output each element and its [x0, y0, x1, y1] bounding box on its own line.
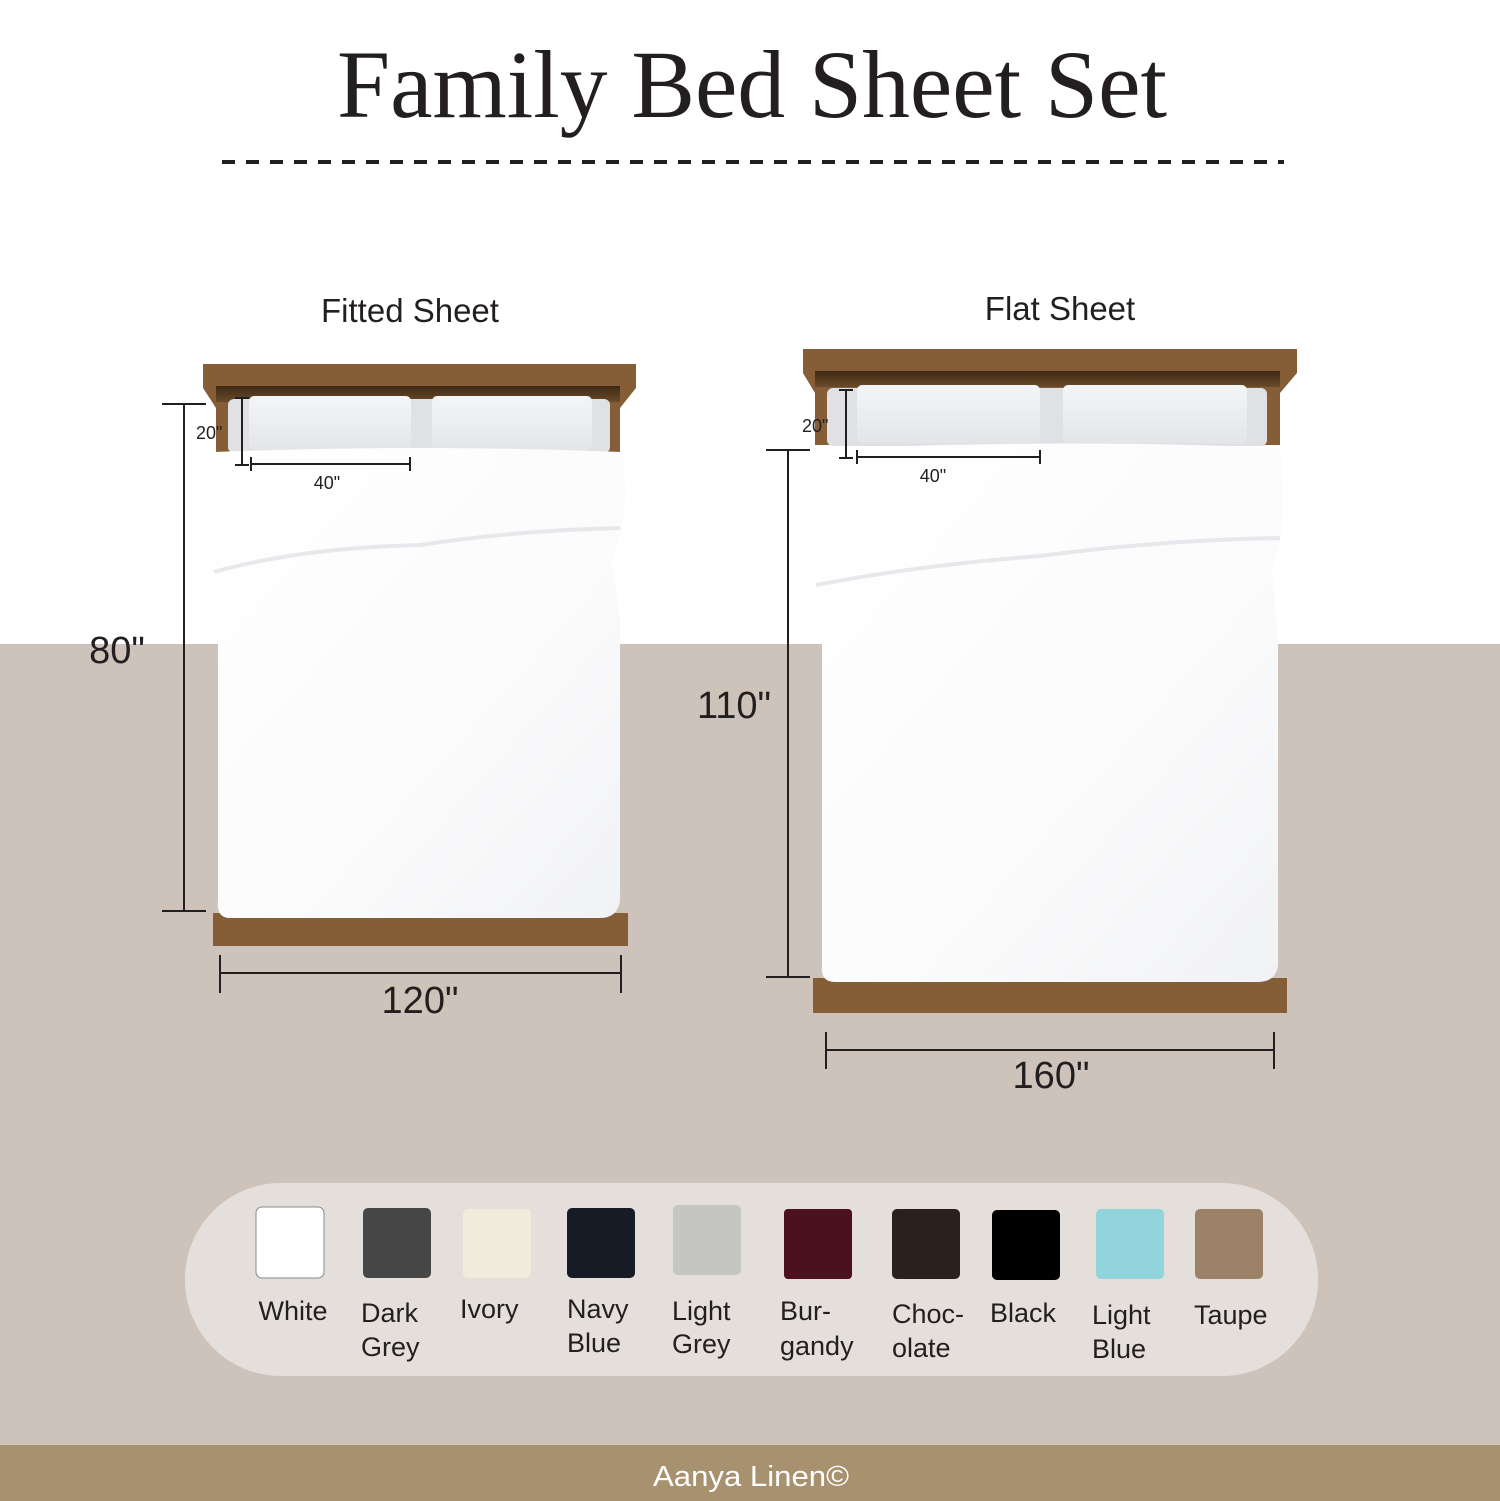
label: 110": 110": [697, 685, 771, 727]
label: 20" 40" fitted: 20": [196, 423, 222, 443]
swatch: ivory: Ivory: [460, 1294, 519, 1324]
swatch: navy blue: [567, 1208, 635, 1358]
swatch: taupe: Taupe: [1194, 1300, 1268, 1330]
label: 160": 160": [1013, 1055, 1089, 1097]
swatch: light blue: Blue: [1092, 1334, 1146, 1364]
swatch: black: Black: [990, 1298, 1057, 1328]
bed: fitted: [203, 364, 636, 946]
label: 20" 40" flat: 40": [920, 466, 946, 486]
swatch: navy blue: Blue: [567, 1328, 621, 1358]
label: 20" 40" flat: [802, 416, 946, 486]
swatch: light grey: Light: [672, 1296, 731, 1326]
swatch: light blue: [1092, 1209, 1164, 1364]
swatch: light grey: Grey: [672, 1329, 731, 1359]
footer: [0, 1445, 1500, 1501]
dimension: fitted width 120: [220, 955, 621, 993]
swatch: dark grey: Dark: [361, 1298, 419, 1328]
swatch: white: [256, 1207, 328, 1326]
swatch: chocolate: [892, 1209, 964, 1363]
footer: Aanya Linen©: [653, 1461, 849, 1493]
swatch: burgundy: [780, 1209, 854, 1361]
dimension: fitted pillow: [235, 398, 410, 471]
heading: flat sheet: Flat Sheet: [985, 290, 1135, 327]
swatch: burgundy: gandy: [780, 1331, 854, 1361]
dimension: flat height 110: [766, 450, 810, 977]
dimension: fitted height 80: [162, 404, 206, 911]
swatch: ivory: [460, 1209, 531, 1324]
heading: fitted sheet: Fitted Sheet: [321, 292, 499, 329]
label: 20" 40" flat: 20": [802, 416, 828, 436]
label: 20" 40" fitted: [196, 423, 340, 493]
label: 120": 120": [382, 980, 458, 1022]
swatch: navy blue: Navy: [567, 1294, 629, 1324]
swatch: light blue: Light: [1092, 1300, 1151, 1330]
bed: flat: [803, 349, 1297, 1013]
swatch: burgundy: Bur-: [780, 1296, 831, 1326]
label: 20" 40" fitted: 40": [314, 473, 340, 493]
panel: colour swatches: [185, 1183, 1318, 1376]
title: Family Bed Sheet Set: [337, 31, 1167, 138]
swatch: dark grey: Grey: [361, 1332, 420, 1362]
label: 80": 80": [89, 630, 145, 672]
swatch: dark grey: [361, 1208, 431, 1362]
dimension: flat pillow: [839, 390, 1040, 464]
swatch: white: White: [258, 1296, 328, 1326]
swatch: chocolate: Choc-: [892, 1299, 964, 1329]
swatch: black: [990, 1210, 1060, 1328]
swatch: chocolate: olate: [892, 1333, 951, 1363]
swatch: taupe: [1194, 1209, 1268, 1330]
swatch: light grey: [672, 1205, 741, 1359]
dimension: flat width 160: [826, 1032, 1274, 1069]
